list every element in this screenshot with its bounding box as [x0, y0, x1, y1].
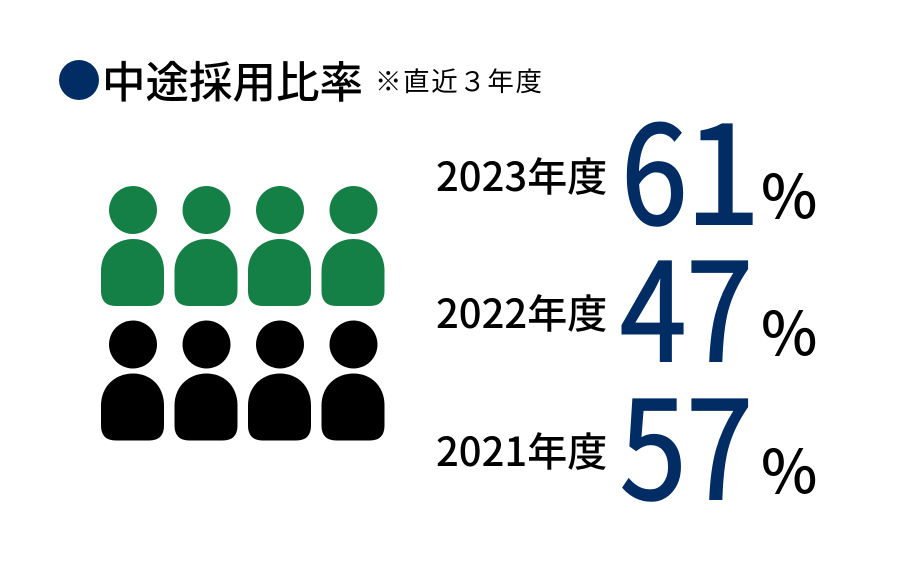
subtitle note: ※直近３年度: [375, 60, 544, 99]
pictogram: black people: [101, 320, 384, 440]
2023 row: 6: [621, 66, 687, 263]
2021 row: 2021年度: [436, 420, 607, 478]
2021 row: %: [761, 424, 817, 511]
2022 row: %: [761, 286, 817, 373]
2021 row: 57: [620, 341, 753, 538]
2022 row: 47: [620, 203, 753, 400]
title marker: [59, 60, 99, 100]
pictogram: green people: [101, 186, 384, 306]
2022 row: 2022年度: [436, 282, 607, 340]
2023 row: [436, 66, 817, 264]
2023 row: %: [761, 149, 817, 236]
2021 row: [436, 341, 817, 538]
2023 row: 2023年度: [436, 145, 607, 203]
2022 row: [436, 203, 817, 400]
2023 row: 1: [685, 67, 760, 264]
title: 中途採用比率: [102, 48, 363, 111]
